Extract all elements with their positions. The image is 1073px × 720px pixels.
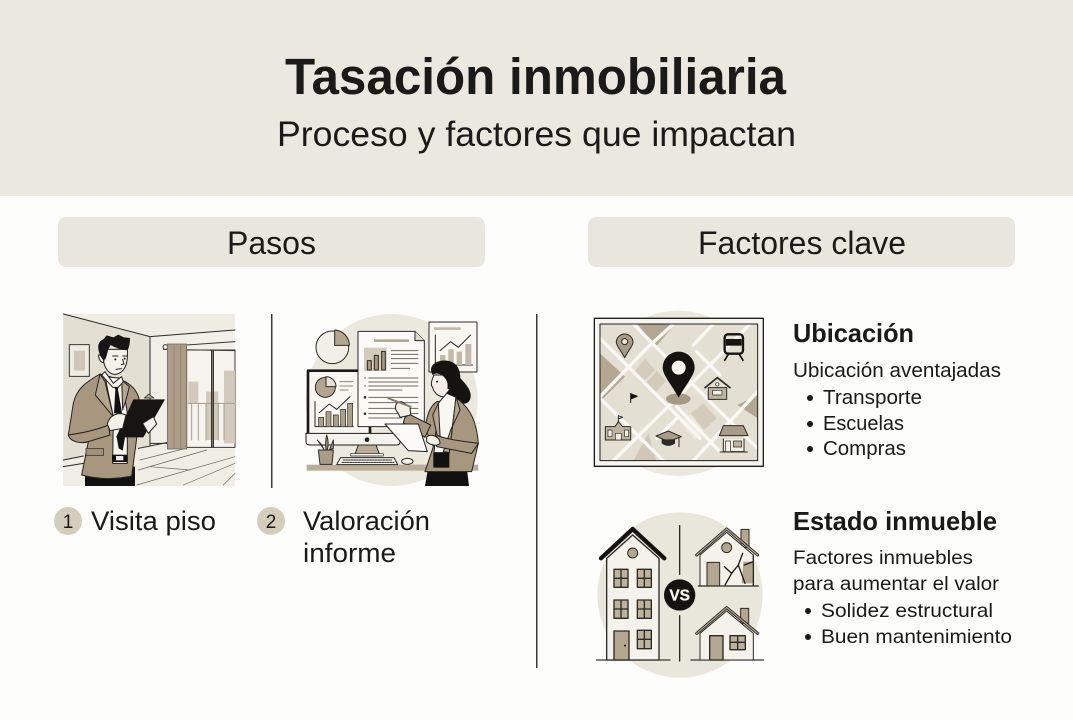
desk [307,465,478,471]
text block: Estado inmueble: Solidez estructural [821,600,993,622]
text block: Estado inmueble: Buen mantenimiento [821,626,1012,648]
report document [358,331,424,427]
good house [697,608,758,660]
step 1 label: Visita piso [91,506,216,536]
school [605,422,631,440]
step 2 label: 2 [266,512,276,533]
panel heading: Pasos [58,217,485,267]
small pin [616,334,633,358]
shop [719,426,748,436]
step 2 label: Valoración [303,506,430,536]
panel heading: Factores clave: Factores clave [698,225,906,261]
pie chart [316,331,349,364]
text block: Ubicación: Ubicación [793,318,914,348]
panel heading: Factores clave [588,217,1015,267]
graduation cap [656,431,681,442]
keyboard [337,458,398,465]
plant [317,435,333,450]
flag [631,393,637,403]
title: Tasación inmobiliaria [285,48,787,105]
header band [0,0,1073,196]
main pin [663,352,695,398]
illustration: appraiser visiting apartment [63,314,235,486]
train [725,334,743,354]
house [705,378,730,388]
panel heading: Pasos: Pasos [227,225,316,261]
text block: Estado inmueble: Factores inmuebles [793,548,973,569]
text block: Estado inmueble: Estado inmueble [793,506,997,536]
step 2 label [257,506,430,568]
window [187,350,235,447]
text block: Ubicación [793,318,1001,460]
text block: Estado inmueble: para aumentar el valor [793,574,1000,595]
text block: Ubicación: Transporte [823,387,922,409]
damaged house [697,529,758,586]
VS badge: VS [669,588,690,605]
VS badge [664,579,695,611]
text block: Ubicación: Compras [823,438,906,460]
step 2 label: informe [303,538,396,568]
picture frame [69,345,89,376]
text block: Ubicación: Ubicación aventajadas [793,360,1001,382]
curtain [167,344,187,449]
text block: Estado inmueble [793,506,1012,648]
illustration: location map [594,311,763,476]
tall house [601,529,664,660]
monitor [308,371,370,435]
woman [385,360,478,486]
subtitle: Proceso y factores que impactan [277,115,796,154]
man [68,335,165,486]
step 1 label: 1 [63,512,73,533]
illustration: analyst preparing valuation report [306,314,478,486]
framed chart [429,322,477,372]
text block: Ubicación: Escuelas [823,413,904,435]
illustration: property condition comparison [597,512,763,678]
